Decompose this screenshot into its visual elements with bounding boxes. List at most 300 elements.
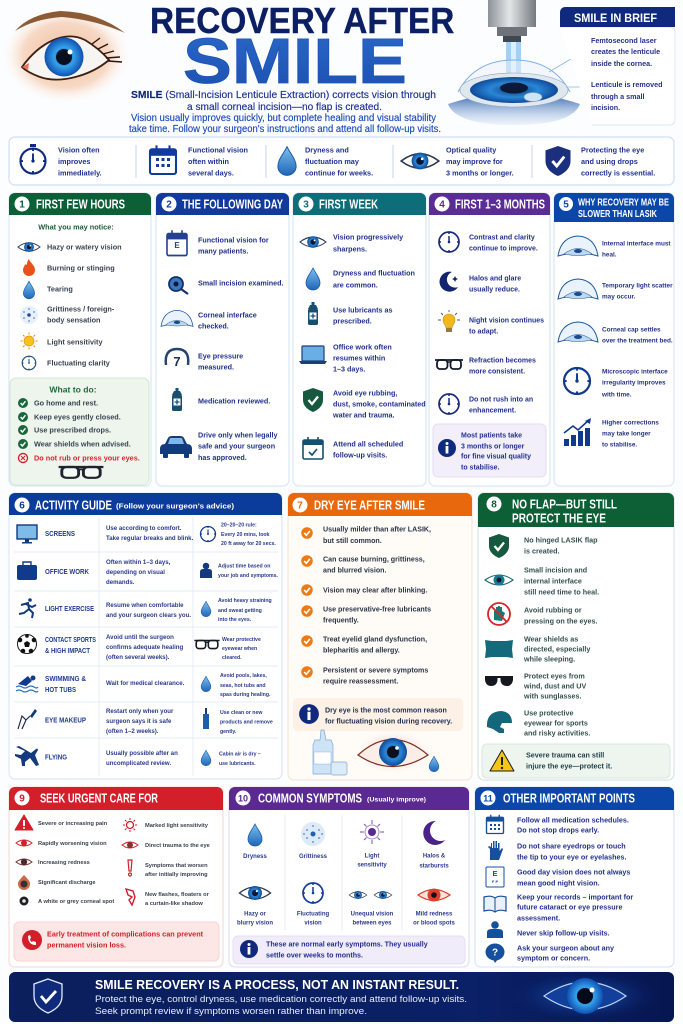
panel 5: why recovery may be slower [554, 193, 674, 486]
icon: eye [485, 574, 513, 586]
check [301, 605, 313, 617]
text: to stabilise. [602, 442, 637, 448]
text: future cataract or eye pressure [517, 902, 622, 912]
heading bar [9, 193, 151, 215]
heading text: OTHER IMPORTANT POINTS [503, 790, 635, 806]
heading text: COMMON SYMPTOMS [258, 790, 362, 806]
text: Fluctuating clarity [47, 358, 111, 368]
text: Protect eyes from [524, 672, 585, 680]
icon: gauge: 7 [173, 354, 181, 369]
text: Do not share eyedrops or touch [517, 842, 626, 850]
text: dryness: fluctuation may [305, 157, 360, 166]
label: CONTACT SPORTS [45, 635, 96, 644]
text: Usually possible after an [106, 750, 178, 757]
icon: red eye [16, 840, 32, 846]
text: Keep eyes gently closed. [34, 412, 121, 422]
text: spas during healing. [220, 692, 271, 698]
text: safe and your surgeon [198, 442, 275, 450]
text: optical quality: may improve for [446, 157, 503, 166]
text: Avoid pools, lakes, [220, 673, 267, 679]
text: protecting the eye: and using drops [581, 157, 638, 166]
heading bar [478, 493, 674, 527]
heading text: DRY EYE AFTER SMILE [314, 498, 425, 512]
label: Halos & [423, 854, 446, 860]
text: Marked light sensitivity [145, 823, 209, 829]
callout: dry eye note [293, 698, 463, 731]
icon: bulb [438, 310, 460, 332]
text: has approved. [198, 453, 247, 462]
text: Wear shields as [524, 634, 578, 644]
heading text line 2: SLOWER THAN LASIK [578, 209, 658, 220]
heading text: FIRST WEEK [319, 196, 378, 212]
text: demands. [106, 579, 135, 586]
title: SMILE: SMILE [183, 25, 407, 97]
text: Vision may clear after blinking. [323, 586, 427, 594]
text: Halos and glare [469, 276, 521, 282]
text: optical quality: Optical quality [446, 146, 497, 154]
icon: info [299, 704, 319, 724]
text: functional vision: several days. [188, 168, 234, 178]
label: Grittiness [299, 854, 328, 860]
icon: calendar [150, 145, 176, 174]
number badge [292, 498, 308, 512]
illustration: red eye [355, 729, 431, 775]
text: for fluctuating vision during recovery. [325, 718, 452, 726]
icon: sunglasses [485, 676, 513, 686]
label: SCREENS [45, 529, 75, 538]
icon: clock [564, 368, 590, 394]
check [301, 555, 313, 567]
intro text: take time. Follow your surgeon's instructions and attend all follow-up visits. [129, 124, 441, 135]
text: many patients. [198, 246, 248, 256]
icon: dome [558, 236, 598, 256]
text: blepharitis and allergy. [323, 646, 400, 654]
icon: clock [439, 394, 459, 414]
number badge [298, 196, 314, 212]
text: to adapt. [469, 328, 498, 336]
intro text: Vision usually improves quickly, but complete healing and visual stability [131, 113, 437, 124]
text: Follow all medication schedules. [517, 816, 629, 824]
icon: trauma eye [122, 842, 138, 848]
icon: dome [558, 322, 598, 342]
heading bar [293, 193, 426, 215]
text: A white or grey corneal spot [38, 899, 114, 905]
text: more consistent. [469, 368, 525, 376]
box heading: What to do: [49, 384, 97, 394]
text: injure the eye—protect it. [526, 762, 612, 770]
text: the tip to your eye or eyelashes. [517, 852, 626, 862]
heading bar [229, 787, 469, 810]
text: Corneal cap settles [602, 326, 661, 334]
text: Early treatment of complications can prevent [47, 930, 204, 938]
text: for fine visual quality [461, 454, 531, 460]
intro text [129, 90, 441, 135]
text: your job and symptoms. [218, 573, 279, 579]
icon: shield [546, 146, 570, 176]
number badge [14, 790, 30, 806]
title: recovery after: RECOVERY AFTER [150, 2, 454, 41]
text: Can cause burning, grittiness, [323, 556, 425, 564]
text: usually reduce. [469, 286, 520, 294]
text: vision often improves: Vision often [58, 146, 100, 154]
label: between eyes [352, 920, 392, 926]
number badge: 9 [19, 794, 25, 804]
text: cleared. [222, 655, 242, 661]
icon: tear [429, 756, 439, 772]
panel 3: first week [293, 193, 426, 486]
text: uncomplicated review. [106, 760, 171, 767]
number badge [480, 790, 496, 806]
text: frequently. [323, 616, 359, 624]
text: Temporary light scatter [602, 282, 673, 290]
text: while sleeping. [523, 654, 575, 664]
text: protecting the eye: Protecting the eye [581, 146, 644, 154]
check: eyes closed [18, 412, 28, 422]
text: and sweat getting [218, 608, 262, 614]
text: checked. [198, 322, 229, 330]
text: Severe or increasing pain [38, 821, 108, 827]
icon: doctor [487, 921, 503, 938]
icon: light sensitivity [360, 820, 384, 844]
text: after initially improving [145, 872, 208, 878]
icon: drop [306, 268, 320, 290]
icon: eye [300, 236, 326, 248]
icon: target clock [439, 232, 459, 252]
icon: eye [18, 242, 40, 252]
text: Vision progressively [333, 232, 403, 242]
check: go home [18, 398, 28, 408]
callout: severe trauma [482, 744, 670, 778]
label: FLYING [45, 752, 67, 762]
text: over the treatment bed. [602, 338, 673, 344]
text: Use clean or new [220, 710, 263, 716]
icon: gauge [166, 349, 188, 369]
label: or blood spots [413, 920, 455, 926]
text: may occur. [602, 294, 636, 300]
text: eyewear for sports [524, 718, 588, 728]
icon: bottle [308, 302, 318, 325]
heading text: PROTECT THE EYE [512, 510, 606, 526]
illustration: human eye [8, 11, 125, 98]
icon: medication bottle [172, 388, 182, 411]
heading text: THE FOLLOWING DAY [182, 196, 283, 212]
icon: drop [201, 750, 211, 766]
text: but still common. [323, 537, 382, 545]
text: Wear shields when advised. [34, 440, 131, 448]
text: vision often improves: immediately. [58, 168, 102, 178]
text: Adjust time based on [218, 564, 270, 570]
number badge: 3 [303, 200, 309, 210]
text: Ask your surgeon about any [517, 944, 614, 952]
text: Do not rush into an [469, 396, 533, 404]
callout: most patients [433, 424, 546, 477]
text: and your surgeon clears you. [106, 612, 191, 619]
icon: stopwatch [20, 144, 46, 174]
text: Persistent or severe symptoms [323, 666, 428, 674]
text: Restart only when your [106, 708, 174, 715]
label: Light [365, 854, 379, 860]
text: into the eyes. [218, 617, 252, 623]
heading text: ACTIVITY GUIDE [35, 498, 112, 512]
icon: cornea [161, 310, 193, 326]
text: Eye pressure [198, 352, 243, 360]
panel: key points strip [9, 137, 674, 185]
icon: eye chart: E [492, 869, 498, 878]
check [301, 666, 313, 678]
icon: makeup [18, 709, 37, 729]
text: Cabin air is dry – [219, 752, 261, 758]
icon: two eyes [349, 891, 392, 899]
icon: drop [278, 147, 296, 175]
icon: drop [248, 824, 262, 846]
text: irregularity improves [602, 380, 666, 386]
text: eyewear when [222, 646, 257, 652]
text: dryness: continue for weeks. [305, 168, 373, 178]
text: Contrast and clarity [469, 234, 535, 242]
text: vision often improves: improves [58, 157, 90, 166]
number badge: 2 [166, 200, 172, 210]
icon: no hand [488, 603, 510, 625]
icon: helmet [487, 711, 512, 733]
text: Do not stop drops early. [517, 826, 599, 834]
text: dryness: Dryness and [305, 146, 349, 154]
heading: SMILE in brief [560, 7, 675, 27]
check [301, 635, 313, 647]
subheading: What you may notice: [38, 222, 114, 232]
icon: laptop [299, 346, 327, 364]
number badge [162, 196, 176, 212]
text: Night vision continues [469, 318, 544, 324]
number badge [236, 790, 250, 806]
text: may take longer [602, 430, 651, 438]
icon: question bubble: ? [492, 948, 498, 958]
label: HOT TUBS [45, 685, 76, 694]
heading text: FIRST 1–3 MONTHS [455, 196, 545, 212]
text: Treat eyelid gland dysfunction, [323, 636, 427, 644]
text: depending on visual [106, 569, 165, 576]
panel 8: no flap but still protect [478, 493, 674, 780]
text: wind, dust and UV [523, 682, 586, 690]
icon: moon [440, 272, 458, 292]
panel 7: dry eye after SMILE [288, 493, 472, 780]
icon: plane [15, 746, 39, 766]
footer text: Seek prompt review if symptoms worsen rather than improve. [95, 1006, 367, 1016]
icon: shield [489, 534, 509, 558]
illustration: lubricant bottle and jar [313, 730, 347, 775]
text: body sensation [47, 316, 101, 324]
check [301, 527, 313, 539]
text: brief explanation: Femtosecond laser [591, 36, 657, 45]
text: Wait for medical clearance. [106, 680, 185, 687]
panel 6: activity guide [9, 493, 282, 779]
number badge: 10 [238, 794, 248, 804]
icon: eye chart: E [174, 241, 180, 250]
text: Avoid until the surgeon [106, 634, 174, 641]
panel 10: common symptoms [229, 787, 469, 967]
text: 1–3 days. [333, 364, 365, 374]
text: heal. [602, 252, 617, 258]
text: Functional vision for [198, 236, 269, 244]
text: Often within 1–3 days, [106, 559, 171, 566]
icon: clock [200, 526, 216, 542]
text: continue to improve. [469, 246, 538, 252]
text: confirms adequate healing [106, 644, 183, 651]
icon: monitor [17, 525, 37, 544]
text: (often 1–2 weeks). [106, 728, 159, 735]
number badge [14, 498, 30, 512]
text: Dry eye is the most common reason [325, 706, 447, 714]
panel 2: following day [156, 193, 289, 486]
icon: warning [15, 815, 33, 830]
label: Unequal vision [351, 912, 394, 918]
icon: sun [20, 332, 38, 350]
text: internal interface [524, 576, 582, 586]
icon: runner [19, 598, 36, 618]
text: functional vision: often within [188, 157, 229, 166]
text: Tearing [47, 284, 73, 294]
icon: eye chart: F P [492, 879, 498, 884]
text: Microscopic interface [602, 368, 668, 376]
icon: shield [303, 388, 323, 412]
number badge: 1 [19, 200, 25, 210]
icon: briefcase [17, 562, 37, 580]
callout: early treatment [14, 922, 219, 961]
text: is created. [524, 546, 560, 556]
text: brief explanation: Lenticule is removed [591, 80, 662, 89]
text: Refraction becomes [469, 358, 536, 364]
text: 20 ft away for 20 secs. [221, 541, 276, 547]
label: SWIMMING & [45, 674, 86, 683]
label: & HIGH IMPACT [45, 646, 91, 655]
text: Increasing redness [38, 860, 90, 866]
icon: hand [488, 841, 503, 860]
text: and blurred vision. [323, 566, 386, 574]
icon: calendar [486, 815, 504, 834]
heading bar [9, 787, 223, 810]
text: surgeon says it is safe [106, 718, 172, 725]
text: Grittiness / foreign- [47, 304, 115, 314]
icon: eye chart [167, 230, 187, 256]
number badge: 6 [19, 500, 25, 512]
text: Hazy or watery vision [47, 242, 122, 252]
text: Severe trauma can still [526, 750, 604, 760]
text: Avoid heavy straining [218, 598, 272, 604]
text: dust, smoke, contaminated [333, 400, 426, 408]
text: Wear protective [222, 637, 261, 643]
text: assessment. [517, 914, 560, 922]
intro text: SMILE (Small-Incision Lenticule Extraction) corrects vision through [131, 90, 436, 101]
text: Most patients take [461, 432, 522, 440]
icon: flash [126, 889, 135, 905]
label: OFFICE WORK [45, 567, 90, 576]
callout: normal early symptoms [233, 936, 465, 964]
icon: mascara bottle [203, 708, 209, 729]
text: use lubricants. [219, 761, 256, 767]
text: Rapidly worsening vision [38, 841, 107, 847]
text: Every 20 mins, look [221, 532, 270, 538]
text: require reassessment. [323, 678, 398, 686]
text: Internal interface must [602, 240, 671, 248]
text: symptom or concern. [517, 954, 590, 962]
footer heading: SMILE RECOVERY IS A PROCESS, NOT AN INSTANT RESULT. [95, 978, 459, 992]
text: functional vision: Functional vision [188, 146, 248, 154]
text: brief explanation: creates the lenticule [591, 47, 660, 56]
text: measured. [198, 362, 234, 372]
illustration: laser and cornea [448, 0, 586, 125]
icon: calendar check [303, 437, 323, 459]
text: to stabilise. [461, 464, 500, 472]
icon: grit [20, 306, 38, 324]
chart icon: rising bars [564, 418, 591, 446]
label: LIGHT EXERCISE [45, 604, 94, 613]
icon: corneal spot [20, 896, 28, 906]
icon: fluctuating clock [22, 356, 36, 370]
number badge [486, 496, 502, 512]
text: products and remove [220, 720, 273, 726]
text: optical quality: 3 months or longer. [446, 168, 514, 178]
text: Burning or stinging [47, 264, 115, 272]
text: Significant discharge [38, 880, 96, 886]
number badge: 5 [563, 200, 569, 210]
text: with sunglasses. [523, 692, 582, 700]
text: mean good night vision. [517, 878, 600, 888]
text: brief explanation: incision. [591, 103, 620, 112]
text: are common. [333, 280, 378, 290]
text: Office work often [333, 342, 392, 352]
text: 3 months or longer [461, 444, 525, 450]
icon: goggles [194, 640, 220, 649]
icon: phone [22, 930, 42, 950]
text: Drive only when legally [198, 430, 278, 440]
footer text: Protect the eye, control dryness, use medication correctly and attend follow-up visits. [95, 994, 467, 1004]
panel 11: other important points [475, 787, 674, 967]
warning text: Do not rub or press your eyes. [34, 454, 140, 462]
icon: question bubble [486, 944, 504, 963]
heading bar [156, 193, 289, 215]
text: Symptoms that worsen [145, 863, 208, 869]
text: brief explanation: inside the cornea. [591, 59, 652, 68]
number badge: 7 [297, 500, 303, 512]
text: Good day vision does not always [517, 868, 630, 876]
text: Go home and rest. [34, 398, 98, 408]
text: protecting the eye: correctly is essential. [581, 168, 655, 178]
text: resumes within [333, 354, 385, 362]
icon: pillow [485, 640, 513, 658]
box: what to do [10, 378, 149, 485]
text: Direct trauma to the eye [145, 843, 210, 849]
text: water and trauma. [332, 410, 395, 420]
icon: glasses [435, 360, 463, 369]
heading bar [288, 493, 472, 516]
panel 9: seek urgent care [9, 787, 223, 967]
heading bar [475, 787, 674, 810]
icon: grit [301, 822, 325, 846]
icon: red eye [418, 888, 450, 902]
text: Use preservative-free lubricants [323, 606, 431, 614]
label: Mild redness [416, 912, 453, 918]
text: still need time to heal. [524, 588, 599, 596]
heading text: SMILE IN BRIEF [574, 13, 657, 25]
text: Take regular breaks and blink. [106, 535, 194, 542]
icon: book [484, 896, 506, 912]
text: directed, especially [524, 644, 590, 654]
number badge: 8 [491, 500, 497, 510]
icon: football [18, 634, 36, 654]
glow [510, 970, 660, 1022]
text: enhancement. [469, 408, 516, 414]
number badge [559, 197, 573, 211]
text: follow-up visits. [333, 450, 387, 460]
